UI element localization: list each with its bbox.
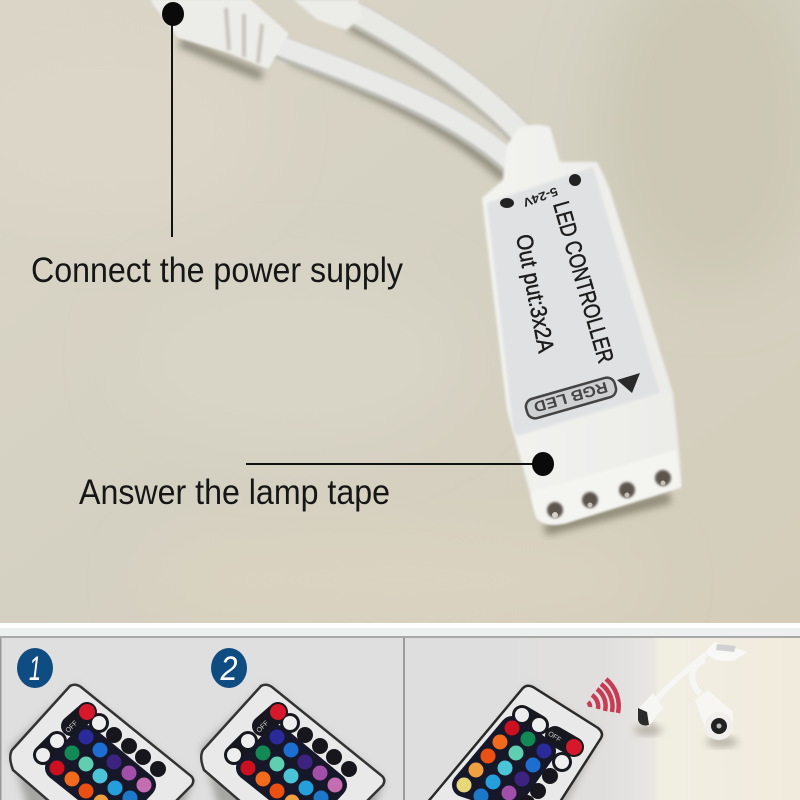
icon: remote 2: OFF [256,720,270,734]
text: output rating: Out put:3x2A [511,232,560,355]
text: connect the power supply: Connect the power supply [31,251,403,290]
panel: remote steps 1 and 2 [0,638,403,800]
callout: lamp tape pointer [246,452,554,476]
icon: power cables [150,0,522,164]
icon: plus terminal [569,174,581,186]
badge: RGB LED: RGB LED [532,378,609,415]
badge: RGB LED [524,376,618,420]
icon: small controller with connectors [634,642,747,747]
label sticker [487,167,660,435]
badge: step 2 [211,648,247,688]
icon: remote 1: OFF [65,720,79,734]
text: LED CONTROLLER: LED CONTROLLER [548,198,619,366]
icon: remote 3 [425,686,602,800]
icon: warning triangle [617,373,640,393]
callout: power pointer [162,2,184,237]
panel: product photo [0,0,800,630]
icon: remote 2 [201,685,384,800]
cable shadows [180,26,530,178]
icon: remote 3: OFF [546,731,562,744]
pins [547,470,671,518]
icon: LED controller [482,125,681,524]
icon: remote 1 [10,685,193,800]
icon: minus terminal [500,198,514,208]
text: voltage: 5-24V [521,184,560,210]
badge: step 2: 2 [220,650,238,688]
badge: step 1 [17,648,53,688]
panel: remote pairing [403,638,800,800]
text: answer the lamp tape: Answer the lamp tape [79,473,390,512]
icon: infrared signal waves [588,679,619,713]
badge: step 1: 1 [29,650,41,688]
header strip [0,623,800,800]
connector face [532,450,681,524]
